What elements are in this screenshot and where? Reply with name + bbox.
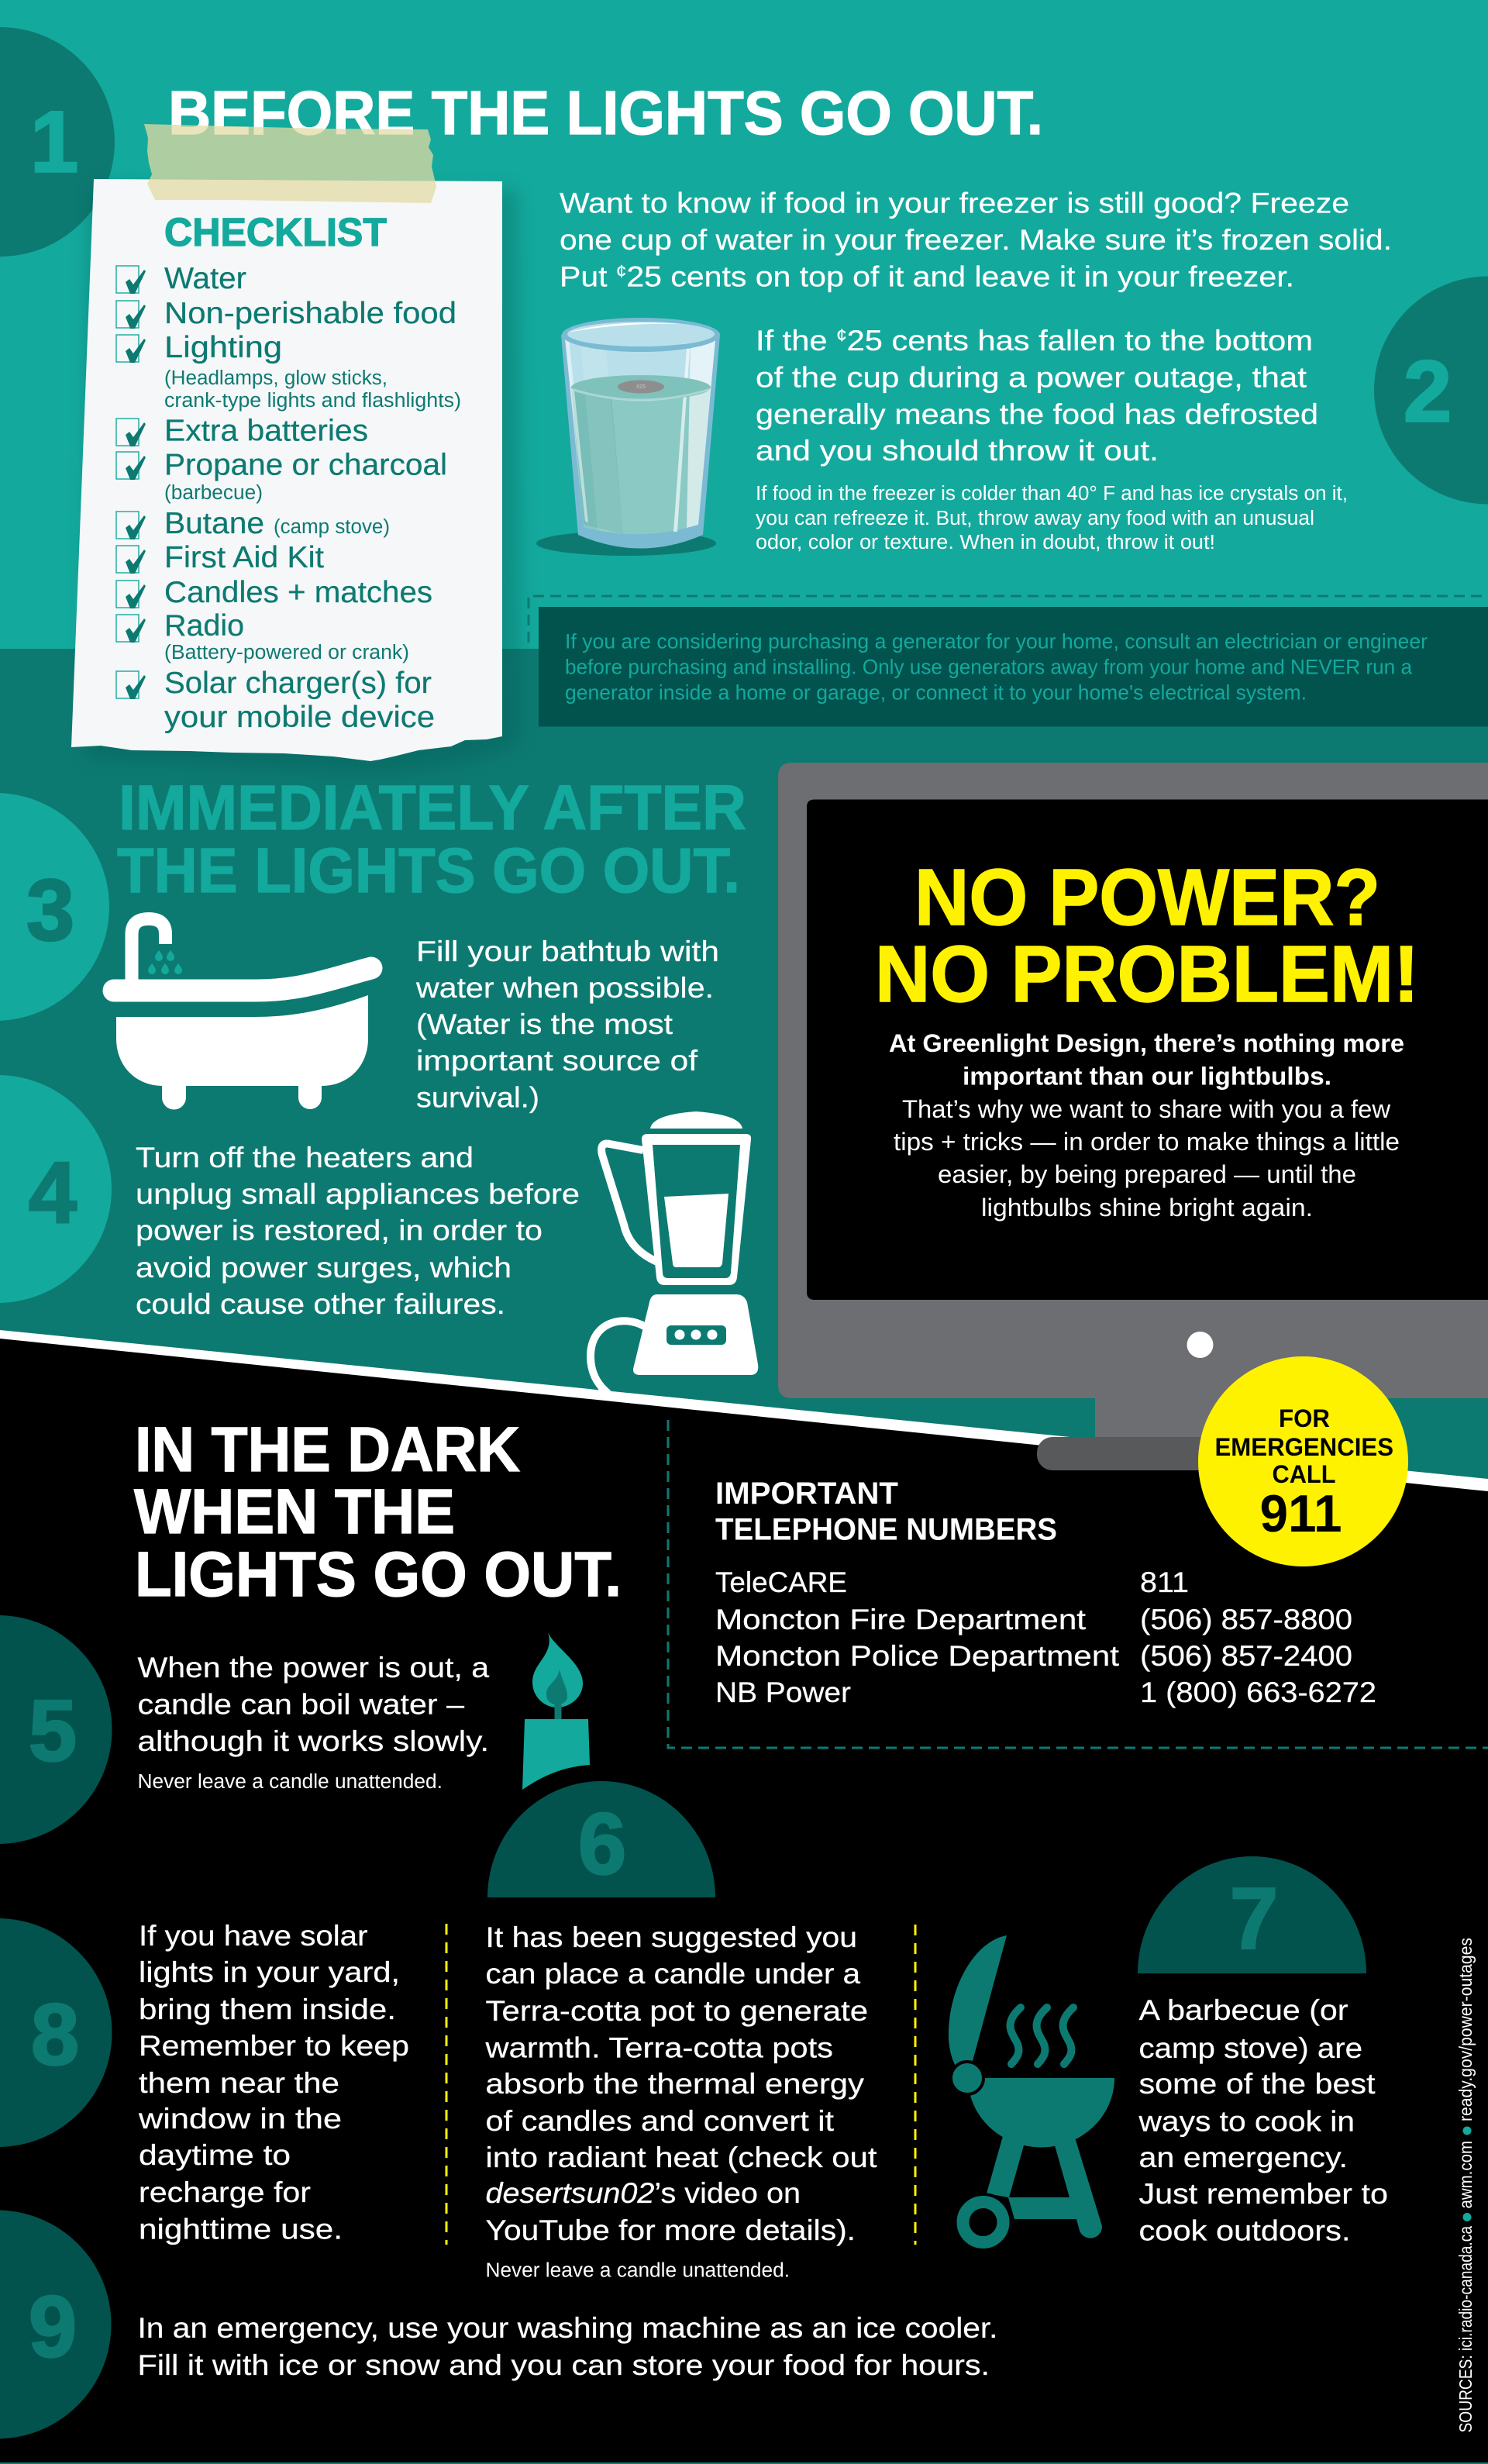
text: fill your bathtub: important source of: [416, 1044, 698, 1077]
text: barbecue tip: camp stove) are: [1139, 2032, 1362, 2064]
phone names: [715, 1566, 1120, 1708]
text: greenlight intro: important than our lightbulbs.: [963, 1062, 1331, 1090]
checklist items: [164, 262, 461, 734]
heading: no power no problem: NO PROBLEM!: [875, 929, 1419, 1018]
icon: bathtub: [114, 919, 371, 1110]
text: solar lights: [138, 1919, 409, 2245]
text: barbecue tip: Just remember to: [1139, 2177, 1388, 2210]
text: washing machine cooler: In an emergency, use your washing machine as an ice cooler.: [138, 2311, 998, 2344]
number badge 2: [1374, 276, 1488, 504]
heading: no power no problem: NO POWER?: [914, 853, 1380, 942]
text: barbecue tip: some of the best: [1139, 2067, 1376, 2100]
checklist items: Candles + matches: [164, 576, 432, 609]
checklist items: (Headlamps, glow sticks,: [164, 367, 388, 389]
number badge 4: [0, 1075, 112, 1303]
text: candle boil water: [138, 1651, 489, 1793]
number badge 1: [0, 27, 115, 257]
text: terra-cotta pot heater: [484, 1921, 877, 2282]
checklist items: Propane or charcoal: [164, 448, 447, 482]
heading: immediately after the lights go out: THE LIGHTS GO OUT.: [117, 836, 740, 906]
heading: in the dark when the lights go out: LIGHTS GO OUT.: [135, 1539, 622, 1610]
text: freezer tip intro: Want to know if food in your freezer is still good? Freeze: [560, 186, 1349, 219]
text: barbecue tip: ways to cook in: [1138, 2105, 1355, 2138]
panel: important telephone numbers: [668, 1420, 1488, 1748]
text: refreezing note: [756, 483, 1348, 553]
phone numbers: (506) 857-2400: [1140, 1639, 1352, 1672]
heading: no power no problem: [875, 853, 1419, 1018]
text: refreezing note: odor, color or texture. When in doubt, throw it out!: [756, 532, 1215, 553]
number badge 6: 6: [578, 1795, 626, 1893]
number badge 8: [0, 1918, 112, 2147]
callout: emergency 911 badge: [1198, 1356, 1408, 1566]
phone names: TeleCARE: [715, 1566, 847, 1598]
icon: glass of water with coin: ¢25: [636, 384, 646, 390]
text: turn off the heaters: avoid power surges, which: [136, 1251, 512, 1284]
heading: immediately after the lights go out: [117, 773, 746, 906]
checklist items: (camp stove): [274, 516, 390, 538]
number badge 9: [0, 2211, 112, 2438]
callout: emergency 911 badge: EMERGENCIES: [1215, 1433, 1393, 1461]
text: turn off the heaters: unplug small appliances before: [136, 1177, 580, 1210]
background: dark teal band: [0, 649, 1488, 1501]
text: coin result explanation: If the: [756, 324, 820, 357]
panel: black night section: [0, 1335, 1488, 2462]
number badge 1: 1: [30, 93, 78, 191]
text: terra-cotta pot heater: can place a candle under a: [485, 1957, 860, 1990]
text: barbecue tip: cook outdoors.: [1139, 2214, 1350, 2246]
icon: candle: [522, 1632, 590, 1790]
icon: barbecue grill: [949, 1935, 1114, 2252]
callout: generator warning: If you are considering purchasing a generator for your home, consult an electrician or engineer: [565, 629, 1428, 653]
text: greenlight intro: That’s why we want to share with you a few: [902, 1095, 1391, 1123]
text: freezer tip intro: one cup of water in your freezer. Make sure it’s frozen solid.: [560, 223, 1392, 256]
text: freezer tip intro: ¢: [616, 262, 626, 281]
text: terra-cotta pot heater: of candles and convert it: [485, 2104, 835, 2137]
text: freezer tip intro: [560, 186, 1392, 293]
callout: emergency 911 badge: FOR: [1279, 1404, 1330, 1432]
text: coin result explanation: [756, 324, 1318, 467]
text: barbecue tip: an emergency.: [1139, 2141, 1348, 2173]
text: greenlight intro: At Greenlight Design, there’s nothing more: [889, 1029, 1404, 1057]
text: terra-cotta pot heater: Terra-cotta pot to generate: [485, 1994, 868, 2027]
text: turn off the heaters: [136, 1141, 580, 1320]
sources credit: ready.gov/power-outages: [1455, 1938, 1476, 2121]
phone heading: TELEPHONE NUMBERS: [715, 1513, 1057, 1547]
phone names: Moncton Police Department: [715, 1639, 1120, 1672]
text: refreezing note: you can refreeze it. But, throw away any food with an unusual: [756, 508, 1314, 529]
text: solar lights: Remember to keep: [139, 2029, 409, 2062]
panel: checklist paper note: [71, 179, 521, 775]
text: fill your bathtub: Fill your bathtub with: [416, 935, 719, 967]
callout: emergency 911 badge: CALL: [1273, 1460, 1336, 1488]
checklist items: Radio: [164, 609, 244, 643]
text: candle boil water: When the power is out, a: [138, 1651, 489, 1683]
text: greenlight intro: [889, 1029, 1404, 1222]
callout: generator warning: generator inside a home or garage, or connect it to your home's electrical system.: [565, 681, 1307, 704]
text: fill your bathtub: [415, 935, 719, 1113]
text: solar lights: lights in your yard,: [139, 1956, 400, 1988]
text: coin result explanation: generally means the food has defrosted: [756, 398, 1318, 430]
text: barbecue tip: A barbecue (or: [1139, 1994, 1348, 2026]
text: fill your bathtub: water when possible.: [415, 971, 714, 1004]
number badge 7: [1138, 1856, 1366, 1973]
checklist items: Lighting: [164, 331, 282, 364]
text: turn off the heaters: power is restored, in order to: [136, 1214, 542, 1246]
text: barbecue tip: [1138, 1994, 1388, 2246]
checklist items: Extra batteries: [164, 414, 368, 448]
text: solar lights: daytime to: [139, 2138, 291, 2171]
text: solar lights: bring them inside.: [139, 1993, 396, 2025]
dashed divider left: [445, 1924, 448, 2245]
heading: in the dark when the lights go out: WHEN THE: [134, 1477, 455, 1547]
heading: immediately after the lights go out: IMMEDIATELY AFTER: [119, 773, 746, 843]
text: turn off the heaters: could cause other failures.: [136, 1287, 505, 1320]
heading: in the dark when the lights go out: [134, 1415, 622, 1610]
text: candle boil water: although it works slowly.: [138, 1725, 489, 1757]
callout: emergency 911 badge: 911: [1260, 1484, 1342, 1543]
number badge 8: 8: [31, 1986, 79, 2083]
text: fill your bathtub: (Water is the most: [416, 1008, 673, 1040]
number badge 7: 7: [1230, 1870, 1278, 1967]
phone heading: IMPORTANT: [715, 1477, 898, 1511]
text: fill your bathtub: survival.): [416, 1080, 539, 1113]
checklist items: Non-perishable food: [164, 297, 456, 330]
text: greenlight intro: tips + tricks — in order to make things a little: [894, 1128, 1400, 1156]
title: before the lights go out: BEFORE THE LIGHTS GO OUT.: [168, 78, 1043, 147]
checklist items: Solar charger(s) for: [164, 667, 432, 700]
checklist items: First Aid Kit: [164, 541, 324, 574]
text: greenlight intro: easier, by being prepared — until the: [938, 1160, 1356, 1188]
text: greenlight intro: lightbulbs shine bright again.: [981, 1194, 1313, 1222]
text: coin result explanation: and you should throw it out.: [756, 434, 1159, 467]
text: coin result explanation: 25 cents has fallen to the bottom: [847, 324, 1313, 357]
number badge 6: [487, 1781, 715, 1897]
number badge 2: 2: [1404, 343, 1452, 440]
sources credit: awm.com: [1455, 2141, 1476, 2209]
checklist items: your mobile device: [164, 701, 435, 734]
checklist items: (Battery-powered or crank): [164, 642, 409, 663]
text: terra-cotta pot heater: It has been suggested you: [485, 1921, 857, 1953]
text: terra-cotta pot heater: warmth. Terra-cotta pots: [484, 2031, 833, 2063]
check marks: [126, 270, 146, 699]
text: solar lights: nighttime use.: [139, 2212, 343, 2245]
checklist items: Water: [164, 262, 246, 295]
icon: blender: [591, 1111, 758, 1394]
text: refreezing note: If food in the freezer is colder than 40° F and has ice crystals on it,: [756, 483, 1348, 505]
text: candle boil water: Never leave a candle unattended.: [138, 1771, 443, 1793]
text: solar lights: them near the: [139, 2066, 339, 2099]
checklist items: Butane: [164, 507, 264, 540]
bottom edge strip: [0, 2462, 1488, 2464]
phone names: NB Power: [715, 1676, 851, 1708]
number badge 5: 5: [29, 1682, 77, 1780]
sources credit: [1455, 1938, 1476, 2432]
text: solar lights: recharge for: [139, 2176, 311, 2208]
text: freezer tip intro: 25 cents on top of it and leave it in your freezer.: [626, 260, 1294, 293]
text: washing machine cooler: [138, 2311, 998, 2381]
text: turn off the heaters: Turn off the heaters and: [136, 1141, 474, 1173]
text: terra-cotta pot heater: YouTube for more details).: [485, 2214, 856, 2246]
number badge 3: 3: [26, 862, 74, 958]
heading: in the dark when the lights go out: IN THE DARK: [135, 1415, 520, 1485]
text: candle boil water: candle can boil water –: [138, 1688, 464, 1721]
diagonal white divider: [0, 1330, 1488, 1491]
text: terra-cotta pot heater: Never leave a candle unattended.: [485, 2260, 790, 2282]
phone numbers: [1140, 1566, 1376, 1708]
text: coin result explanation: ¢: [836, 326, 847, 345]
number badge 5: [0, 1615, 112, 1844]
number badge 9: 9: [29, 2279, 77, 2375]
checkboxes: [116, 266, 139, 698]
text: washing machine cooler: Fill it with ice or snow and you can store your food for hours.: [138, 2349, 990, 2381]
phone numbers: 1 (800) 663-6272: [1140, 1676, 1376, 1708]
text: terra-cotta pot heater: desertsun02 ’s video on: [485, 2176, 801, 2209]
text: terra-cotta pot heater: into radiant heat (check out: [485, 2141, 877, 2173]
checklist items: crank-type lights and flashlights): [164, 390, 461, 412]
text: coin result explanation: of the cup during a power outage, that: [756, 361, 1307, 394]
checklist items: (barbecue): [164, 482, 263, 504]
phone numbers: (506) 857-8800: [1140, 1603, 1352, 1635]
text: solar lights: If you have solar: [139, 1919, 367, 1952]
text: solar lights: window in the: [138, 2102, 342, 2135]
phone heading: [715, 1477, 1057, 1547]
icon: glass of water with coin: [536, 318, 720, 556]
dashed divider right: [914, 1925, 916, 2245]
masking tape: [144, 124, 436, 203]
panel: television: [778, 763, 1488, 1470]
phone numbers: 811: [1140, 1566, 1189, 1598]
background: light teal band: [0, 0, 1488, 649]
number badge 4: 4: [29, 1144, 77, 1242]
callout: generator warning: before purchasing and installing. Only use generators away from your home and NEVER run a: [565, 656, 1412, 679]
phone names: Moncton Fire Department: [715, 1603, 1087, 1635]
checklist heading: CHECKLIST: [164, 210, 387, 254]
number badge 3: [0, 793, 109, 1021]
sources credit: SOURCES: ici.radio-canada.ca: [1455, 2226, 1476, 2432]
text: freezer tip intro: Put: [560, 260, 603, 293]
text: terra-cotta pot heater: absorb the thermal energy: [485, 2067, 864, 2100]
callout: generator warning: [529, 596, 1488, 727]
